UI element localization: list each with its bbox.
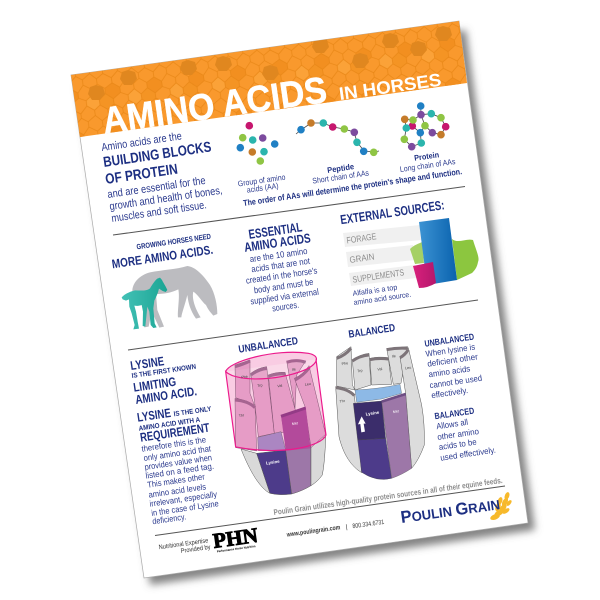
text block: essential amino acids: are the 10 amino (249, 246, 308, 264)
heading: growing horses (111, 232, 214, 271)
text block: essential amino acids: acids that are not (251, 256, 311, 274)
icon: mare (132, 266, 217, 328)
footer credit (158, 537, 212, 555)
title suffix: IN HORSES (338, 70, 443, 104)
text block: unbalanced and balanced notes: other amino (437, 426, 480, 442)
text block: essential amino acids: supplied via external (250, 287, 319, 306)
diagram: protein: Protein (414, 150, 440, 163)
diagram: peptide (296, 119, 379, 186)
text block: lysine: provides value when (144, 452, 213, 472)
panel: external sources: amino acid source. (353, 290, 412, 307)
icon: pink supplement cup (413, 262, 436, 288)
text block: essential amino acids: sources. (271, 300, 300, 313)
logo: PHN: PHN (211, 523, 259, 553)
methionine stave (281, 407, 311, 451)
icon: green forage (410, 239, 479, 280)
intro text block: BUILDING BLOCKS (102, 139, 213, 171)
text block: lysine: therefore this is the (141, 434, 207, 454)
diagram: group of amino acids: Group of amino (237, 173, 287, 188)
header banner (71, 21, 467, 137)
lysine stave (358, 438, 392, 479)
heading: EXTERNAL SOURCES: (339, 197, 445, 227)
text block: essential amino acids (243, 219, 319, 313)
text block: lysine: IS THE FIRST KNOWN (131, 364, 197, 380)
icon: foal (122, 278, 167, 329)
arrow: lysine increase (358, 416, 366, 432)
panel: external sources: FORAGE (346, 231, 377, 245)
diagram: unbalanced barrel: Ile (292, 367, 296, 372)
diagram: balanced barrel: Phe (341, 361, 348, 366)
text block: unbalanced and balanced notes: used effectively. (440, 445, 496, 463)
diagram: unbalanced barrel: Trp (257, 383, 263, 388)
diagram: unbalanced barrel: Leu (305, 382, 311, 387)
free water level (258, 432, 286, 451)
text block: lysine: This makes other (147, 471, 206, 490)
text block: lysine: LIMITING (132, 375, 177, 395)
text block: lysine (129, 354, 220, 526)
tagline: Poulin Grain utilizes high-quality protein sources in all of their equine feeds. (273, 476, 503, 517)
diagram: unbalanced barrel: Val (277, 384, 283, 388)
illustration: mare and foal (122, 266, 217, 329)
text block: lysine: amino acid levels (148, 481, 207, 500)
diagram: group of amino acids: acids (AA) (246, 181, 279, 195)
text block: lysine: LYSINE (129, 354, 165, 373)
panel: external sources: SUPPLEMENTS (352, 267, 405, 285)
diagram: balanced barrel: Val (377, 367, 383, 372)
diagram: unbalanced barrel: Phe (241, 375, 248, 379)
diagram: unbalanced barrel (226, 352, 326, 495)
diagram: group of amino acids (236, 122, 287, 195)
panel: external sources: GRAIN (349, 251, 375, 265)
logo: PHN: Performance Horse Nutrition (217, 544, 256, 553)
text block: lysine: deficiency. (152, 511, 187, 526)
text block: essential amino acids: body and must be (253, 277, 314, 295)
heading: balanced barrel: BALANCED (348, 322, 396, 341)
diagram: peptide: Peptide (327, 162, 355, 175)
title: AMINO ACIDS (100, 69, 329, 141)
text block: unbalanced and balanced notes (424, 332, 496, 463)
text block: lysine: in the case of Lysine (151, 498, 220, 518)
text block: essential amino acids: ESSENTIAL (248, 219, 303, 242)
diagram: balanced barrel: Met (393, 409, 399, 414)
text block: lysine: listed on a feed tag. (145, 461, 215, 481)
panel: external sources (339, 197, 479, 307)
intro text block: OF PROTEIN (104, 162, 179, 188)
heading: unbalanced barrel: UNBALANCED (238, 335, 299, 356)
pink level body (226, 352, 326, 450)
text block: lysine: LYSINE (136, 406, 172, 425)
text block: lysine: AMINO ACID. (134, 384, 198, 407)
intro text block (101, 130, 223, 225)
contact details: www.poulingrain.com (286, 524, 341, 539)
methionine stave (382, 393, 412, 478)
text block: unbalanced and balanced notes: amino acids (428, 363, 471, 379)
logo: Poulin Grain: POULIN GRAIN (399, 494, 501, 527)
text block: unbalanced and balanced notes: effectively. (431, 385, 469, 400)
footer credit: Nutritional Expertise (158, 537, 209, 551)
text block: essential amino acids: created in the horse's (245, 265, 318, 286)
text block: lysine: IS THE ONLY (173, 406, 212, 418)
text block: lysine: only amino acid that (143, 443, 212, 463)
diagram: balanced barrel: Leu (405, 366, 411, 370)
diagram: unbalanced barrel: Lysine (266, 459, 280, 466)
diagram: balanced barrel: Ile (392, 354, 396, 359)
diagram: balanced barrel: Lysine (365, 410, 380, 417)
intro text block: Amino acids are the (101, 130, 183, 154)
text block: lysine: REQUIREMENT (139, 421, 211, 445)
text block: lysine: AMINO ACID WITH A (138, 417, 201, 433)
diagram: protein: Long chain of AAs (399, 157, 456, 174)
intro text block: muscles and soft tissue. (111, 199, 207, 225)
heading: growing horses: MORE AMINO ACIDS. (111, 243, 214, 271)
page drop shadow (78, 30, 535, 585)
pink cylinder outline (226, 352, 326, 450)
panel: external sources: Alfalfa is a top (352, 283, 398, 298)
text block: unbalanced and balanced notes: Allows all (436, 417, 469, 431)
diagram: balanced barrel: Trp (357, 369, 363, 373)
icon: blue grain container (419, 218, 457, 285)
diagram: protein (399, 102, 456, 174)
diagram: peptide: Short chain of AAs (312, 168, 369, 186)
text block: lysine: irrelevant, especially (149, 489, 218, 509)
text block: unbalanced and balanced notes: When lysine is (425, 342, 476, 359)
icon: wheat (489, 491, 513, 521)
text block: unbalanced and balanced notes: UNBALANCED (424, 332, 475, 349)
text block: unbalanced and balanced notes: acids to be (438, 437, 477, 452)
text block: unbalanced and balanced notes: deficient other (427, 351, 479, 369)
intro text block: growth and health of bones, (109, 185, 223, 213)
diagram: unbalanced barrel: Thr (239, 413, 245, 418)
contact details: | (345, 524, 348, 531)
heading: growing horses: GROWING HORSES NEED (136, 232, 212, 251)
contact details (286, 519, 385, 539)
text block: unbalanced and balanced notes: cannot be used (429, 373, 483, 390)
contact details: 800.334.6731 (352, 519, 385, 530)
diagram: balanced barrel: Thr (339, 399, 346, 404)
water level (355, 384, 402, 402)
intro text block: and are essential for the (107, 175, 206, 201)
diagram: unbalanced barrel: Met (292, 421, 298, 426)
caption: order of AAs: The order of AAs will determine the protein's shape and function. (243, 166, 463, 208)
diagram: balanced barrel (336, 347, 424, 479)
footer credit: Provided by (180, 544, 212, 555)
text block: essential amino acids: AMINO ACIDS (243, 230, 312, 255)
text block: unbalanced and balanced notes: BALANCED (434, 406, 475, 421)
page sheet (71, 21, 528, 578)
